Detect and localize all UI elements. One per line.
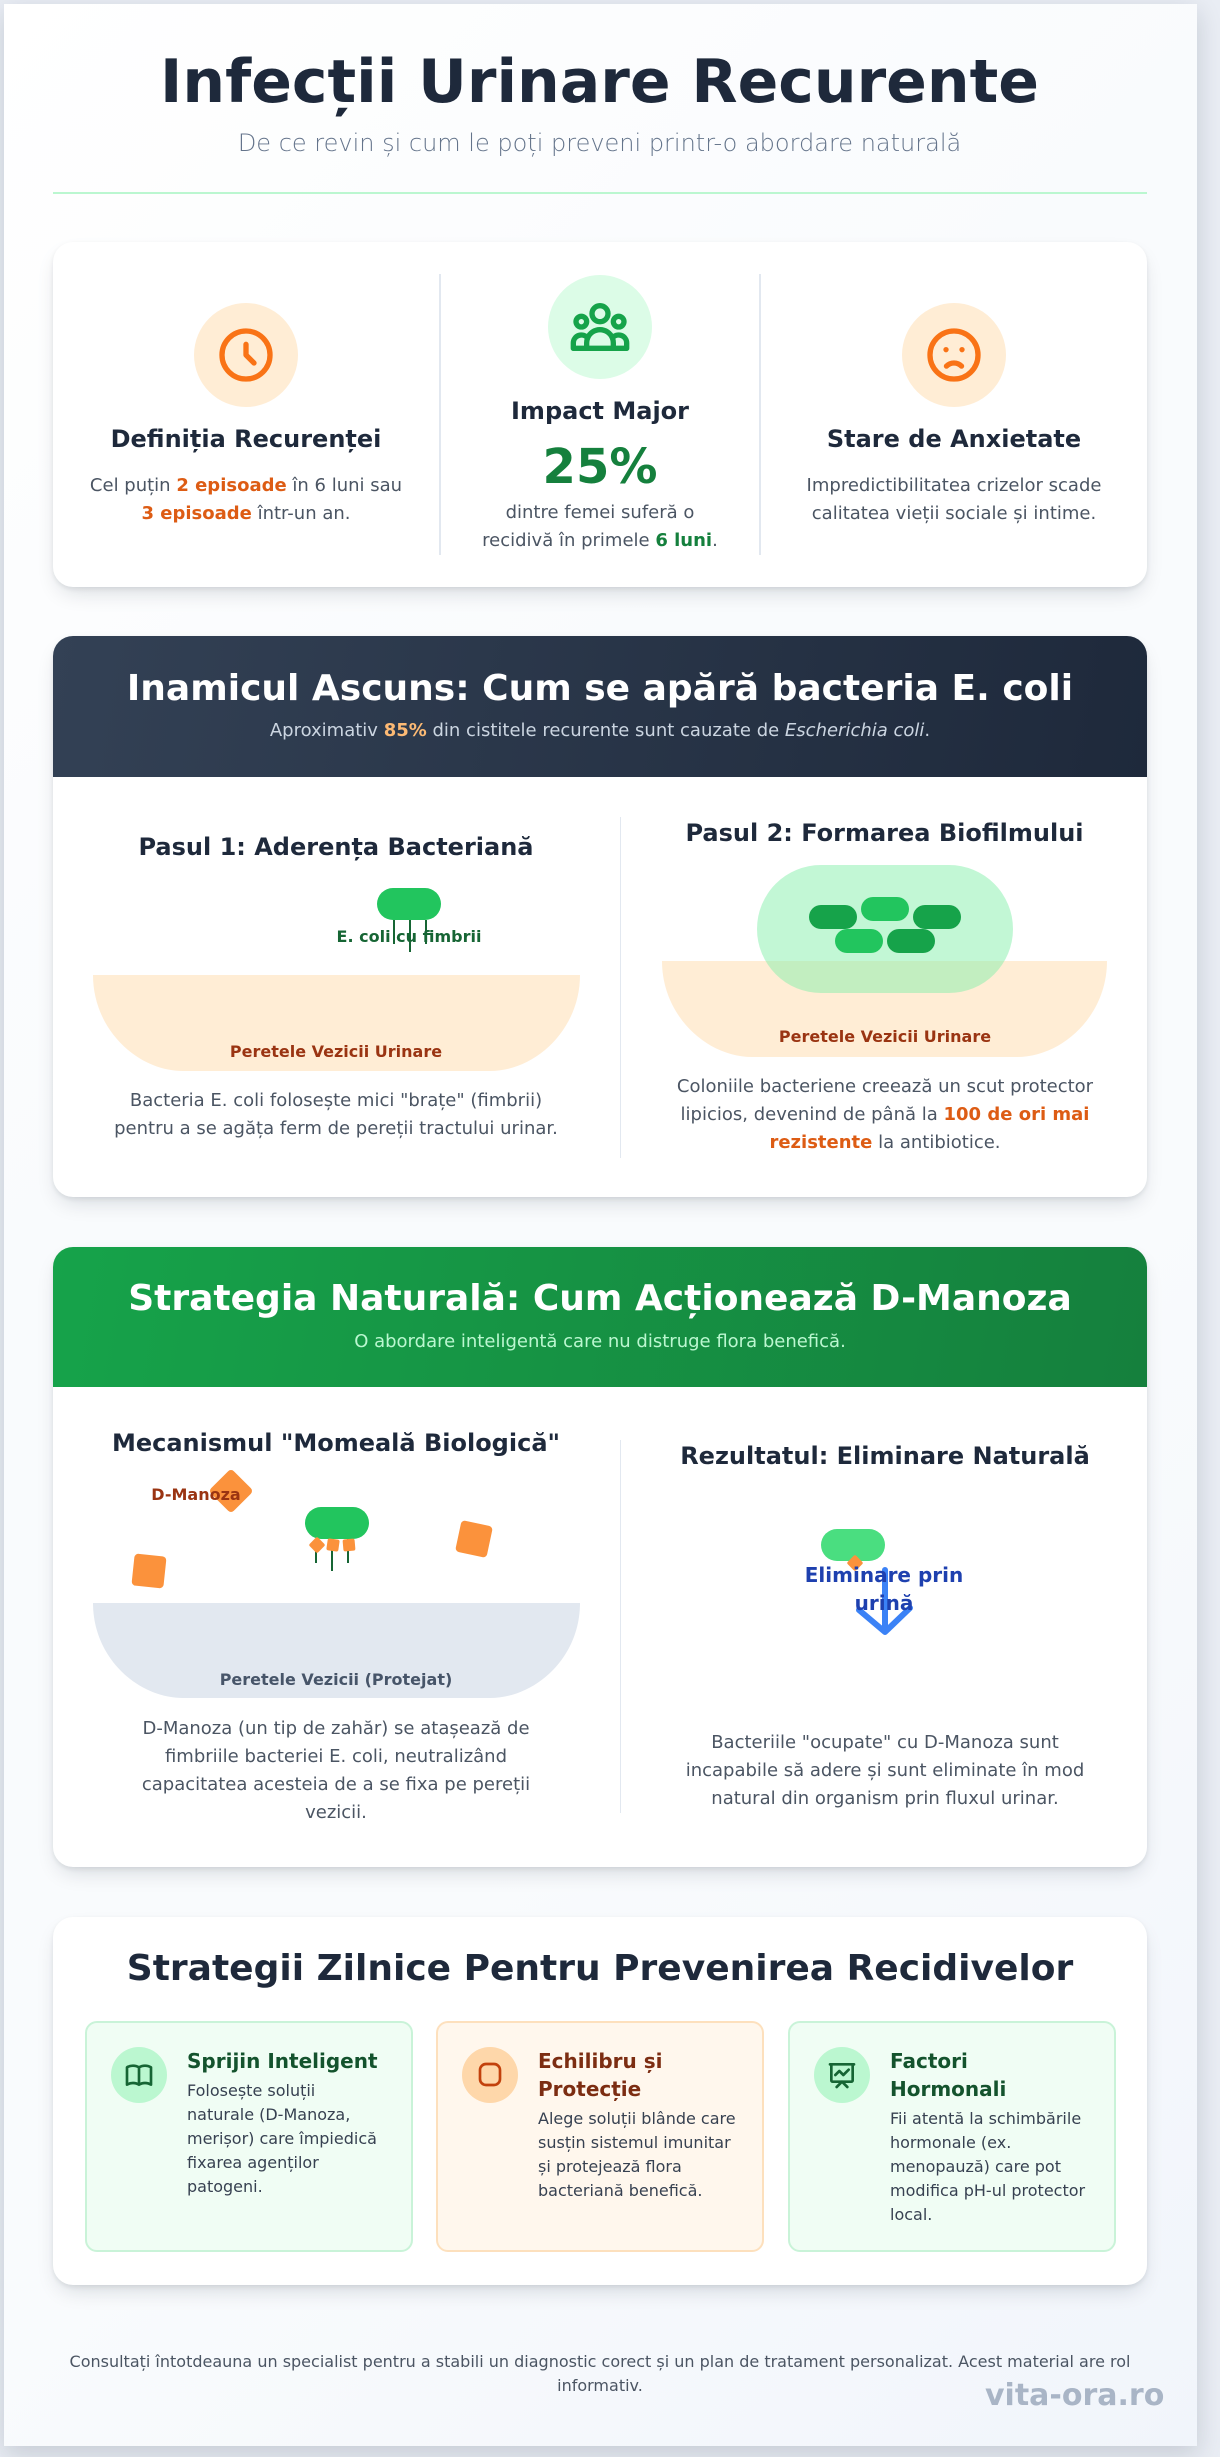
heading: daily strategies: Strategii Zilnice Pentru Prevenirea Recidivelor	[127, 1948, 1073, 1989]
text: balance and protection: Alege soluții blânde care	[538, 2109, 736, 2128]
text: hormonal factors: modifica pH-ul protector	[890, 2181, 1085, 2200]
diagram: biofilm: Peretele Vezicii Urinare	[779, 1027, 991, 1046]
text: impact	[482, 502, 718, 551]
text: mechanism: D-Manoza (un tip de zahăr) se atașează de	[142, 1718, 530, 1739]
text: balance and protection	[538, 2109, 736, 2200]
panel: enemy	[53, 636, 1147, 1197]
text: result	[686, 1732, 1084, 1809]
diagram: bacterial adhesion: Peretele Vezicii Urinare	[230, 1042, 442, 1061]
text: step 1	[114, 1090, 558, 1139]
card: balance and protection	[436, 2021, 764, 2252]
text: step 1: Bacteria E. coli folosește mici "brațe" (fimbrii)	[130, 1090, 542, 1111]
text: hormonal factors: local.	[890, 2205, 932, 2224]
footer disclaimer: informativ.	[557, 2376, 643, 2395]
icon: clock	[194, 303, 298, 407]
text: hormonal factors	[890, 2109, 1086, 2224]
subheading: strategy: O abordare inteligentă care nu distruge flora benefică.	[354, 1331, 846, 1352]
heading: step 2: Pasul 2: Formarea Biofilmului	[685, 819, 1084, 847]
text: definition	[90, 475, 402, 524]
text: step 2: rezistente la antibiotice.	[769, 1132, 1001, 1153]
header band: strategy	[53, 1247, 1147, 1387]
text: smart support: Folosește soluții	[187, 2081, 315, 2100]
subheading: enemy: Aproximativ 85% din cistitele recurente sunt cauzate de Escherichia coli.	[270, 720, 930, 741]
diagram: natural elimination: urină	[855, 1591, 913, 1615]
text: balance and protection: susțin sistemul imunitar	[538, 2133, 731, 2152]
heading: result: Rezultatul: Eliminare Naturală	[680, 1442, 1090, 1470]
diagram: natural elimination: Eliminare prin	[805, 1563, 963, 1587]
subtitle: De ce revin și cum le poți preveni printr-o abordare naturală	[238, 129, 961, 157]
icon: presentation chart	[814, 2047, 870, 2103]
diagram: biological decoy	[93, 1470, 580, 1698]
text: smart support: naturale (D-Manoza,	[187, 2105, 350, 2124]
heading: enemy: Inamicul Ascuns: Cum se apără bacteria E. coli	[127, 668, 1073, 709]
icon: group of people	[548, 275, 652, 379]
text: smart support	[187, 2081, 377, 2196]
text: definition: 3 episoade într-un an.	[141, 503, 350, 524]
header band: enemy	[53, 636, 1147, 777]
text: step 1: pentru a se agăța ferm de pereții tractului urinar.	[114, 1118, 558, 1139]
footer disclaimer	[70, 2352, 1130, 2395]
heading: balance and protection	[538, 2049, 662, 2101]
text: hormonal factors: menopauză) care pot	[890, 2157, 1061, 2176]
text: smart support: fixarea agenților	[187, 2153, 319, 2172]
panel: daily strategies	[53, 1917, 1147, 2285]
text: result: incapabile să adere și sunt eliminate în mod	[686, 1760, 1084, 1781]
diagram: biological decoy: D-Manoza	[151, 1485, 241, 1504]
heading: balance and protection: Protecție	[538, 2077, 641, 2101]
text: step 2	[677, 1076, 1093, 1153]
text: smart support: merișor) care împiedică	[187, 2129, 377, 2148]
heading: anxiety: Stare de Anxietate	[827, 425, 1081, 453]
icon: open book	[111, 2047, 167, 2103]
diagram: biological decoy: Peretele Vezicii (Protejat)	[220, 1670, 452, 1689]
text: hormonal factors: Fii atentă la schimbările	[890, 2109, 1081, 2128]
heading: smart support: Sprijin Inteligent	[187, 2049, 378, 2073]
text: mechanism: capacitatea acesteia de a se fixa pe pereții	[142, 1774, 530, 1795]
statistic: 25%: 25%	[543, 439, 657, 495]
diagram: biofilm	[662, 865, 1107, 1057]
heading: mechanism: Mecanismul "Momeală Biologică"	[112, 1429, 560, 1457]
text: smart support: patogeni.	[187, 2177, 263, 2196]
text: impact: dintre femei suferă o	[506, 502, 694, 523]
text: definition: Cel puțin 2 episoade în 6 luni sau	[90, 475, 402, 496]
title: Infecții Urinare Recurente	[160, 47, 1039, 117]
heading: step 1: Pasul 1: Aderența Bacteriană	[138, 833, 534, 861]
heading: hormonal factors: Hormonali	[890, 2077, 1006, 2101]
icon: rounded square	[462, 2047, 518, 2103]
text: result: natural din organism prin fluxul urinar.	[711, 1788, 1059, 1809]
diagram: natural elimination	[805, 1529, 963, 1635]
heading: hormonal factors: Factori	[890, 2049, 968, 2073]
icon: sad face	[902, 303, 1006, 407]
text: mechanism: fimbriile bacteriei E. coli, neutralizând	[165, 1746, 507, 1767]
text: impact: recidivă în primele 6 luni.	[482, 530, 718, 551]
footer disclaimer: Consultați întotdeauna un specialist pentru a stabili un diagnostic corect și un plan de tratament personalizat. Acest material are rol	[70, 2352, 1130, 2371]
panel: strategy	[53, 1247, 1147, 1867]
text: step 2: Coloniile bacteriene creează un scut protector	[677, 1076, 1093, 1097]
diagram: bacterial adhesion	[93, 888, 580, 1071]
heading: impact: Impact Major	[511, 397, 689, 425]
card: smart support	[85, 2021, 413, 2252]
heading: strategy: Strategia Naturală: Cum Acționează D-Manoza	[128, 1278, 1072, 1319]
card: hormonal factors	[788, 2021, 1116, 2252]
heading: definition: Definiția Recurenței	[111, 425, 381, 453]
watermark: vita-ora.ro	[985, 2378, 1164, 2413]
text: mechanism: vezicii.	[305, 1802, 367, 1823]
text: anxiety	[807, 475, 1101, 524]
text: balance and protection: și protejează flora	[538, 2157, 682, 2176]
panel: key facts	[53, 242, 1147, 587]
text: hormonal factors: hormonale (ex.	[890, 2133, 1011, 2152]
diagram: bacterial adhesion: E. coli cu fimbrii	[337, 927, 481, 946]
heading: balance and protection: Echilibru și	[538, 2049, 662, 2073]
text: step 2: lipicios, devenind de până la 100 de ori mai	[681, 1104, 1089, 1125]
text: anxiety: Impredictibilitatea crizelor scade	[807, 475, 1101, 496]
text: anxiety: calitatea vieții sociale și intime.	[812, 503, 1096, 524]
text: mechanism	[142, 1718, 530, 1823]
heading: hormonal factors	[890, 2049, 1006, 2101]
text: balance and protection: bacteriană benefică.	[538, 2181, 702, 2200]
text: result: Bacteriile "ocupate" cu D-Manoza sunt	[711, 1732, 1059, 1753]
